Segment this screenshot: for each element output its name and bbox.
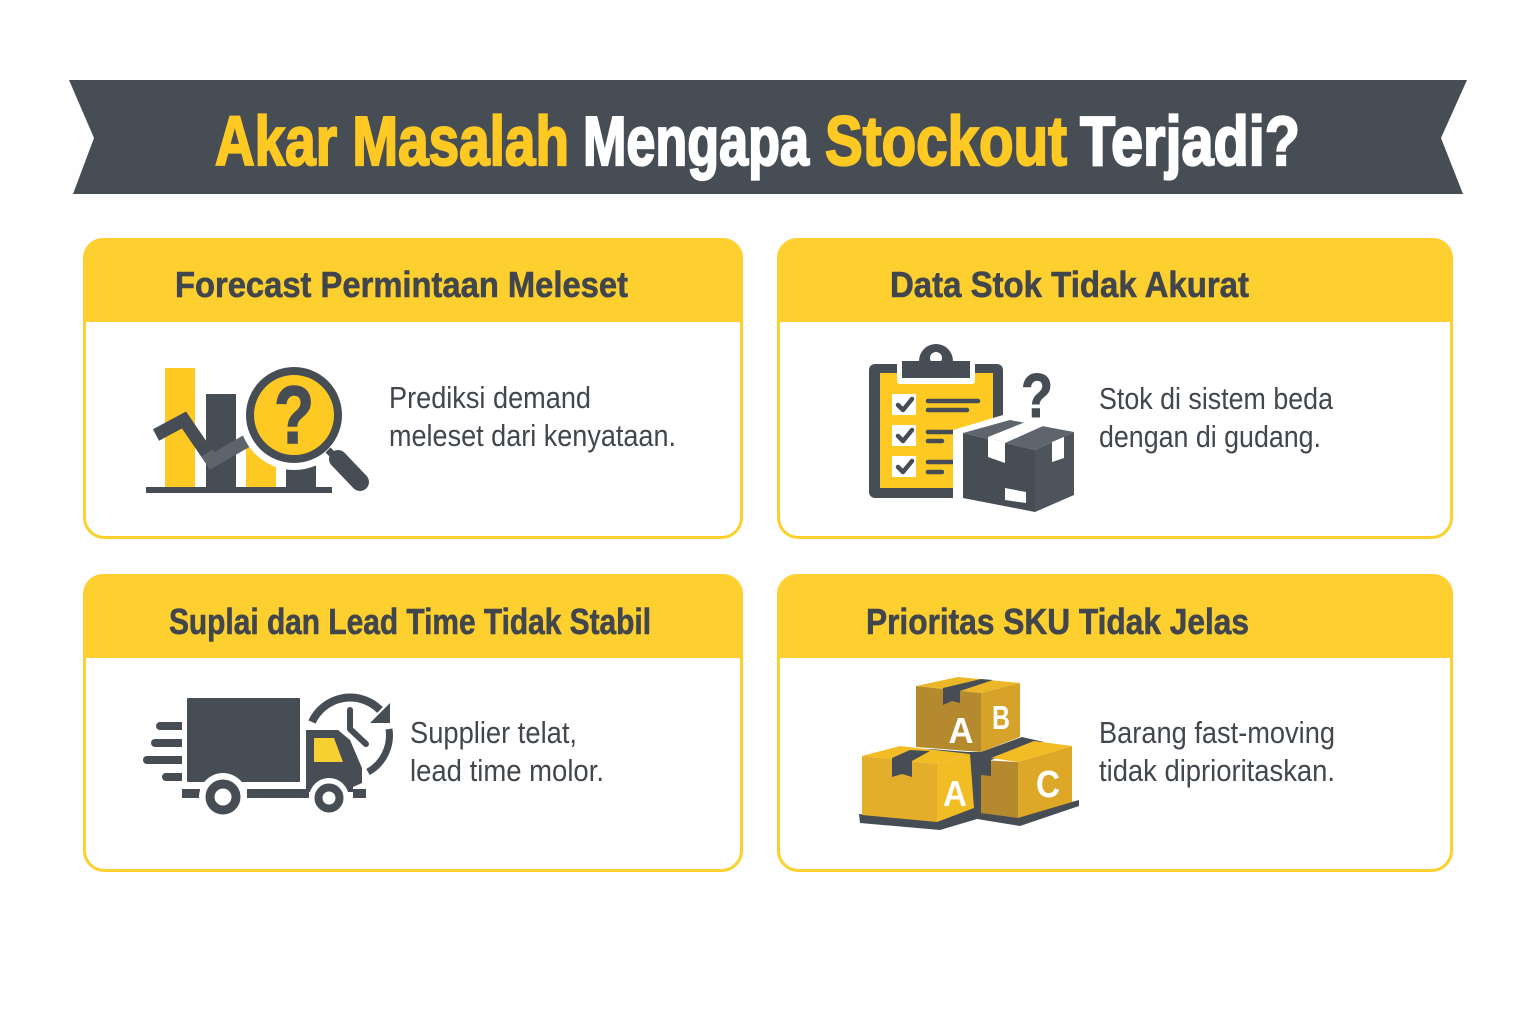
title: Terjadi? — [1080, 102, 1300, 180]
panel: prioritas sku tidak jelas — [777, 574, 1453, 870]
box letters — [943, 699, 1060, 814]
icon: bar chart with magnifier — [146, 360, 360, 493]
text: data stok description — [1099, 381, 1334, 454]
title: Stockout — [825, 102, 1067, 180]
text: suplai description — [410, 715, 604, 788]
title banner — [69, 80, 1467, 194]
text: suplai description: Supplier telat, — [410, 715, 577, 750]
panel: forecast permintaan meleset — [83, 238, 743, 538]
heading: forecast: Forecast Permintaan Meleset — [175, 264, 628, 305]
panel: suplai dan lead time — [83, 574, 743, 870]
icon: delivery truck with clock — [143, 698, 390, 821]
text: prioritas description: tidak diprioritaskan. — [1099, 753, 1335, 788]
text: data stok description: dengan di gudang. — [1099, 419, 1321, 454]
text: prioritas description — [1099, 715, 1335, 788]
icon: bar chart with magnifier: ? — [274, 370, 314, 461]
box letters: C — [1036, 764, 1060, 806]
title: Mengapa — [583, 102, 810, 180]
heading: data stok: Data Stok Tidak Akurat — [890, 264, 1249, 305]
icon: clipboard and box: ? — [1021, 362, 1053, 431]
text: prioritas description: Barang fast-moving — [1099, 715, 1335, 750]
text: forecast description — [389, 380, 676, 453]
text: data stok description: Stok di sistem beda — [1099, 381, 1334, 416]
panel: data stok tidak akurat — [777, 238, 1453, 538]
title: Akar Masalah — [215, 102, 569, 180]
icon: stacked abc boxes — [859, 677, 1079, 830]
title — [215, 102, 1300, 180]
text: suplai description: lead time molor. — [410, 753, 604, 788]
icon: clipboard and box — [869, 344, 1080, 520]
box letters: A — [943, 773, 967, 814]
heading: prioritas: Prioritas SKU Tidak Jelas — [866, 601, 1249, 642]
text: forecast description: meleset dari kenyataan. — [389, 418, 676, 453]
box letters: A — [948, 710, 974, 751]
box letters: B — [992, 699, 1010, 736]
text: forecast description: Prediksi demand — [389, 380, 591, 415]
heading: suplai: Suplai dan Lead Time Tidak Stabil — [169, 601, 651, 642]
